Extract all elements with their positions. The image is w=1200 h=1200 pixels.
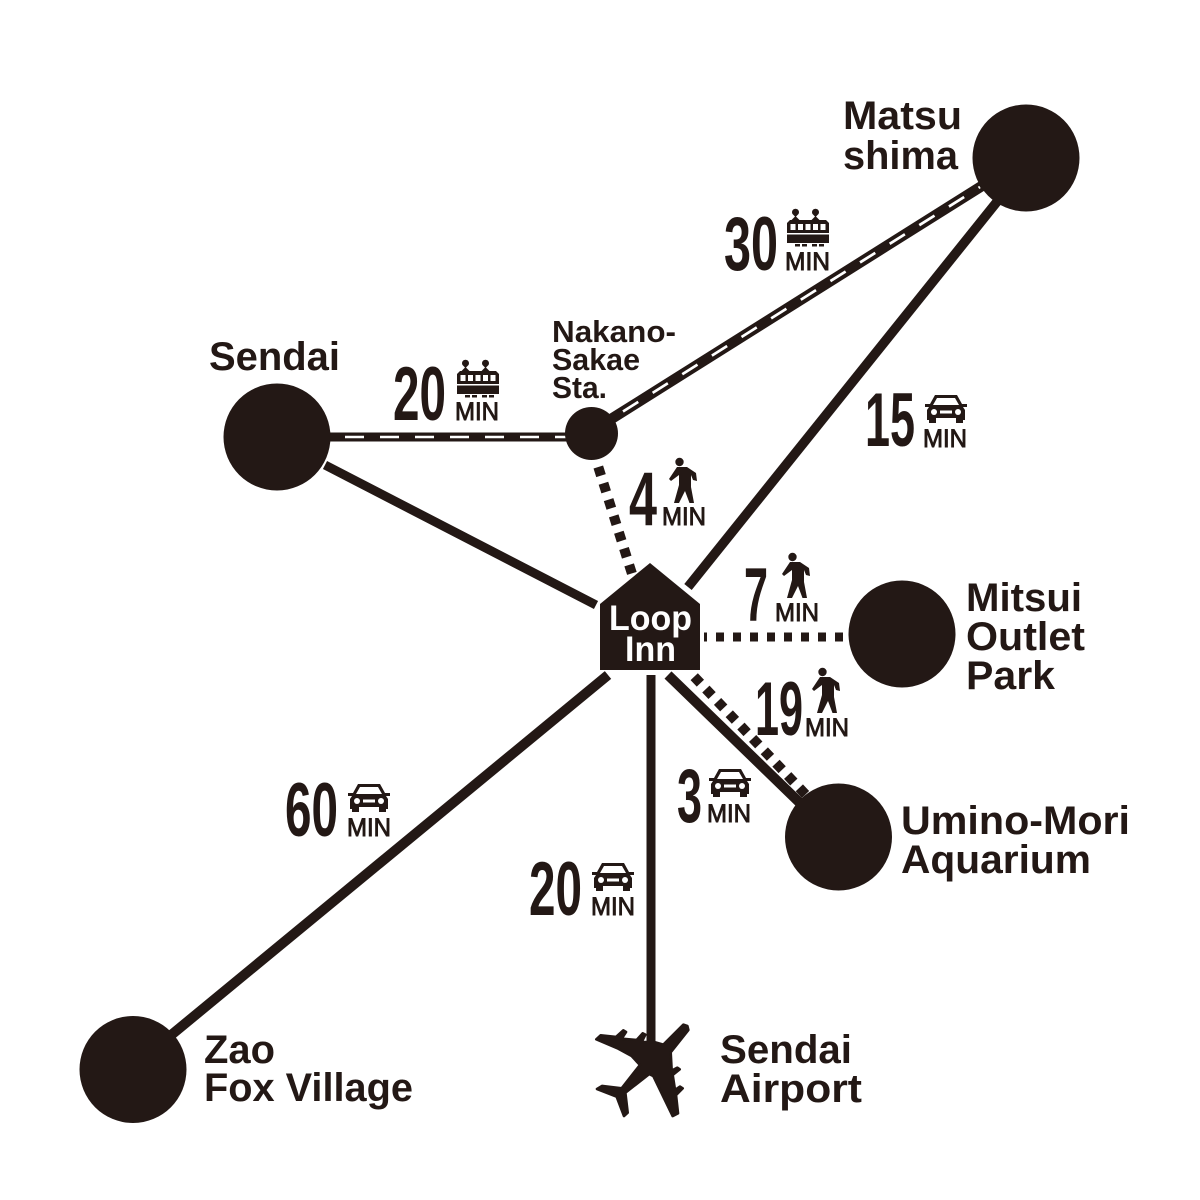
destination: Matsushima: shima: [843, 134, 959, 178]
destination: Sendai Airport: Sendai: [720, 1028, 852, 1072]
destination: Sendai: Sendai: [209, 335, 340, 379]
time label: 7 min walk: MIN: [775, 599, 819, 627]
time label: 20 min by train: 20: [393, 352, 446, 437]
time label: 4 min walk: MIN: [662, 503, 706, 531]
destination: Zao Fox Village: [80, 1016, 413, 1123]
destination: Umino-Mori Aquarium: [785, 784, 1130, 890]
time label: 19 min walk: 19: [755, 667, 803, 752]
time label: 3 min by car: [677, 754, 751, 839]
station: Nakano-Sakae: Sakae: [552, 342, 640, 377]
time label: 20 min by train: MIN: [455, 398, 499, 426]
hub: Loop Inn house: Inn: [625, 630, 676, 669]
destination: Matsushima: [843, 94, 1080, 212]
time label: 20 min by car: MIN: [591, 893, 635, 921]
route: rail Nakano-Sakae to Matsushima: [608, 184, 985, 421]
destination: Zao Fox Village: Zao: [204, 1028, 275, 1072]
destination: Mitsui Outlet Park: [848, 576, 1085, 698]
destination: Mitsui Outlet Park: Mitsui: [966, 576, 1082, 620]
destination: Sendai Airport: Airport: [720, 1067, 862, 1111]
time label: 20 min by car: 20: [529, 847, 582, 932]
destination: Sendai: [209, 335, 340, 490]
destination: Mitsui Outlet Park: Park: [966, 654, 1056, 698]
hub: Loop Inn house: [600, 563, 700, 670]
destination: Zao Fox Village: Fox Village: [204, 1066, 413, 1110]
time label: 19 min walk: MIN: [805, 714, 849, 742]
destination: Umino-Mori Aquarium: Aquarium: [901, 838, 1091, 882]
time label: 3 min by car: 3: [677, 754, 702, 839]
time label: 15 min by car: MIN: [923, 425, 967, 453]
route: Loop Inn to Zao by car: [170, 675, 608, 1036]
destination: Umino-Mori Aquarium: Umino-Mori: [901, 799, 1130, 843]
station: Nakano-Sakae: [552, 314, 676, 460]
time label: 7 min walk: 7: [744, 553, 768, 638]
route: Loop Inn to Sendai Airport by car: [646, 675, 656, 1050]
time label: 4 min walk: [629, 457, 706, 542]
time label: 30 min by train: MIN: [785, 248, 830, 276]
time label: 60 min by car: 60: [285, 768, 338, 853]
destination: Matsushima: Matsu: [843, 94, 962, 138]
time label: 15 min by car: 15: [865, 378, 915, 463]
time label: 7 min walk: [744, 553, 819, 638]
route: Loop Inn to Aquarium by car: [668, 675, 800, 803]
destination: Sendai Airport: [596, 1025, 862, 1116]
station: Nakano-Sakae: Sta.: [552, 370, 607, 405]
destination: Mitsui Outlet Park: Outlet: [966, 615, 1085, 659]
time label: 30 min by train: 30: [724, 202, 778, 287]
station: Nakano-Sakae: Nakano-: [552, 314, 676, 349]
route: rail Sendai to Nakano-Sakae: [325, 432, 570, 442]
route: Sendai to Loop Inn by car: [325, 465, 596, 605]
time label: 60 min by car: MIN: [347, 814, 391, 842]
hub: Loop Inn house: Loop: [609, 599, 692, 638]
time label: 3 min by car: MIN: [707, 800, 751, 828]
route: walk to Mitsui Outlet Park: [704, 632, 850, 642]
time label: 4 min walk: 4: [629, 457, 657, 542]
route: walk to Aquarium: [694, 677, 808, 797]
route: Matsushima to Loop Inn by car: [688, 198, 1000, 587]
route: walk to Nakano-Sakae Station: [598, 467, 633, 577]
